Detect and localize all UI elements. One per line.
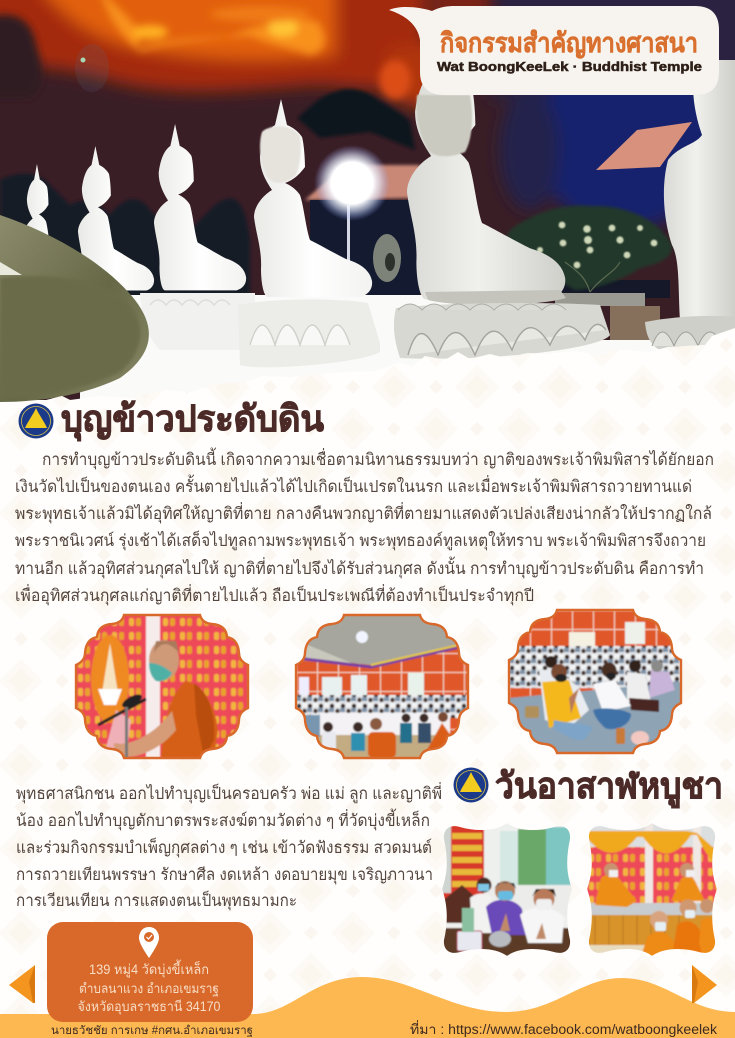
footer credit: source url: ที่มา : https://www.facebook.com/watboongkeelek [410, 1020, 717, 1037]
address text: 139 หมู่4 วัดบุ่งขี้เหล็ก [89, 959, 209, 978]
paragraph: Buddhists making merit on Asalha Puja: น้อง ออกไปทำบุญตักบาตรพระสงฆ์ตามวัดต่าง ๆ ที่วัดบุ่งขี้เหล็ก [16, 808, 430, 831]
heading text: วันอาสาฬหบูชา [495, 765, 723, 809]
night sky with orange clouds [0, 0, 735, 400]
paragraph: Buddhists making merit on Asalha Puja: การเวียนเทียน การแสดงตนเป็นพุทธมามกะ [16, 890, 297, 911]
heading: วันอาสาฬหบูชา [454, 765, 723, 809]
address card [47, 922, 253, 1022]
icon: location pin [139, 927, 159, 958]
paragraph: origin of the merit-making tradition: เงินวัดไปเป็นของตนเอง ครั้นตายไปแล้วได้ไปเกิดเป็นเปรตในนรก และเมื่อพระเจ้าพิมพิสารถวายทานแด่ [15, 474, 692, 496]
arrow: next [692, 965, 717, 1003]
photo: seated worshippers praying on blue mat [509, 610, 681, 753]
address text: ตำบลนาแวง อำเภอเขมราฐ [79, 981, 219, 997]
footer credit: author: นายธวัชชัย การเกษ #กศน.อำเภอเขมราฐ [51, 1024, 253, 1037]
plumeria tree [470, 206, 672, 342]
subtitle text: Wat BoongKeeLek · Buddhist Temple [437, 60, 702, 74]
paragraph: origin of the merit-making tradition: เพื่ออุทิศส่วนกุศลแก่ญาติที่ตายไปแล้ว ถือเป็นประเพณีที่ต้องทำเป็นประจำทุกปี [15, 584, 534, 606]
paragraph: origin of the merit-making tradition: พระพุทธเจ้าแล้วมิได้อุทิศให้ญาติที่ตาย กลางคืนพวกญาติที่ตายมาแสดงตัวเปล่งเสียงน่ากลัวให้ปรากฏใกล้ [15, 502, 712, 524]
heading text: บุญข้าวประดับดิน [61, 398, 324, 442]
paragraph: origin of the merit-making tradition: พระราชนิเวศน์ รุ่งเช้าได้เสด็จไปทูลถามพระพุทธเจ้า พระพุทธองค์ทูลเหตุให้ทราบ พระเจ้าพิมพิสารจึงถวาย [15, 530, 706, 551]
torn paper edge of the hero photo [0, 328, 735, 420]
icon: institution logo [454, 768, 488, 802]
photo: hall full of worshippers with monks [296, 615, 468, 758]
address text [78, 959, 220, 1015]
paragraph: Buddhists making merit on Asalha Puja [16, 782, 442, 911]
photo: monk speaking at microphone [76, 615, 248, 758]
paragraph: Buddhists making merit on Asalha Puja: พุทธศาสนิกชน ออกไปทำบุญเป็นครอบครัว พ่อ แม่ ลูก และญาติพี่ [16, 782, 442, 804]
background trees [0, 89, 415, 300]
statue 6 cropped on the right edge [645, 60, 735, 350]
olive foreground statue knee [0, 215, 149, 402]
address text: จังหวัดอุบลราชธานี 34170 [78, 999, 220, 1015]
paragraph: origin of the merit-making tradition [15, 447, 714, 606]
paragraph: Buddhists making merit on Asalha Puja: และร่วมกิจกรรมบำเพ็ญกุศลต่าง ๆ เช่น เข้าวัดฟังธรรม สวดมนต์ [16, 837, 432, 858]
distant white statues 1 to 3 with blown-out white floor [24, 124, 735, 410]
title text: กิจกรรมสำคัญทางศาสนา [440, 28, 698, 59]
statue 5 on lotus base [394, 34, 610, 359]
arrow: previous [9, 965, 35, 1003]
temple roof, lamp post and gong [305, 122, 692, 295]
hero photo: white Buddha statues under a burning sky [0, 0, 735, 410]
photo: monks seated in orange robes [587, 823, 717, 956]
title speech bubble [389, 6, 719, 95]
heading: บุญข้าวประดับดิน [18, 398, 324, 442]
photo: three lay people praying by a window [442, 823, 572, 956]
icon: institution logo [18, 404, 54, 438]
statue 4 on lotus base [238, 99, 410, 367]
yellow wave footer band [0, 977, 735, 1038]
paragraph: Buddhists making merit on Asalha Puja: การถวายเทียนพรรษา รักษาศีล งดเหล้า งดอบายมุข เจริญภาวนา [16, 866, 433, 885]
paragraph: origin of the merit-making tradition: ทานอีก แล้วอุทิศส่วนกุศลไปให้ ญาติที่ตายไปจึงได้รับส่วนกุศล ดังนั้น การทำบุญข้าวประดับดิน คือการทำ [15, 556, 704, 579]
